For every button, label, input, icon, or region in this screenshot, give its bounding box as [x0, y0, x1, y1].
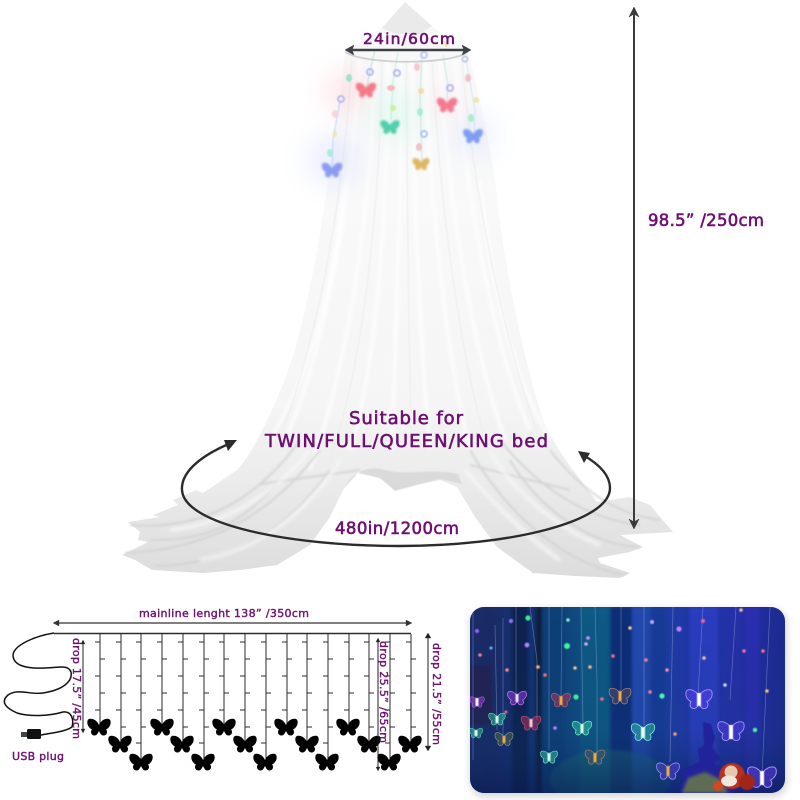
canopy ring: [345, 52, 468, 62]
small bulbs: [338, 52, 468, 137]
mainline arrow: [53, 620, 412, 626]
panel: white canopy net: [122, 2, 673, 578]
label: usb plug: USB plug: [12, 750, 64, 763]
black butterflies: [87, 719, 422, 770]
heading: bed sizes: Suitable for: [349, 408, 464, 429]
drape folds: [125, 440, 660, 575]
curtain background: [470, 607, 785, 793]
coloured glow behind lights: [308, 72, 495, 184]
panel: photo of lit butterfly curtain: [469, 607, 787, 800]
drop arrow 65cm: [376, 638, 380, 771]
panel: string light diagram: [4, 607, 443, 771]
label: drop 45cm: drop 17.5” /45cm: [70, 638, 83, 739]
light wires: [473, 607, 770, 775]
light strands diagram: [54, 634, 416, 762]
butterfly centres: [474, 691, 764, 785]
light strands and butterflies on canopy: [322, 41, 483, 177]
light strands: [332, 50, 475, 165]
christmas tree and santa: [678, 722, 755, 793]
label: circumference: 480in/1200cm: [335, 519, 459, 538]
label: drop 65cm: drop 25.5” /65cm: [377, 641, 390, 743]
label: top diameter: 24in/60cm: [363, 30, 455, 48]
cloth folds: [270, 60, 550, 470]
height arrow: [629, 7, 639, 529]
label: mainline length: mainline lenght 138” /350cm: [139, 607, 309, 620]
drop arrow 55cm: [425, 633, 431, 751]
heading: bed sizes: [264, 408, 548, 452]
canopy butterflies: [322, 83, 483, 177]
circumference arrow: [182, 440, 610, 546]
photo butterflies: [469, 688, 776, 787]
usb cable: [4, 633, 73, 735]
canopy silhouette: [122, 2, 673, 578]
top diameter arrow: [345, 45, 471, 55]
usb plug: [21, 729, 41, 739]
label: height: 98.5” /250cm: [648, 211, 764, 230]
label: drop 55cm: drop 21.5” /55cm: [430, 643, 443, 745]
cone shading: [382, 2, 432, 34]
photo lights: [475, 608, 769, 736]
photo shadow: [470, 609, 787, 797]
hem shadow under the arch: [345, 469, 462, 491]
heading: bed sizes: TWIN/FULL/QUEEN/KING bed: [264, 431, 548, 452]
drop arrow 45cm: [81, 640, 85, 733]
